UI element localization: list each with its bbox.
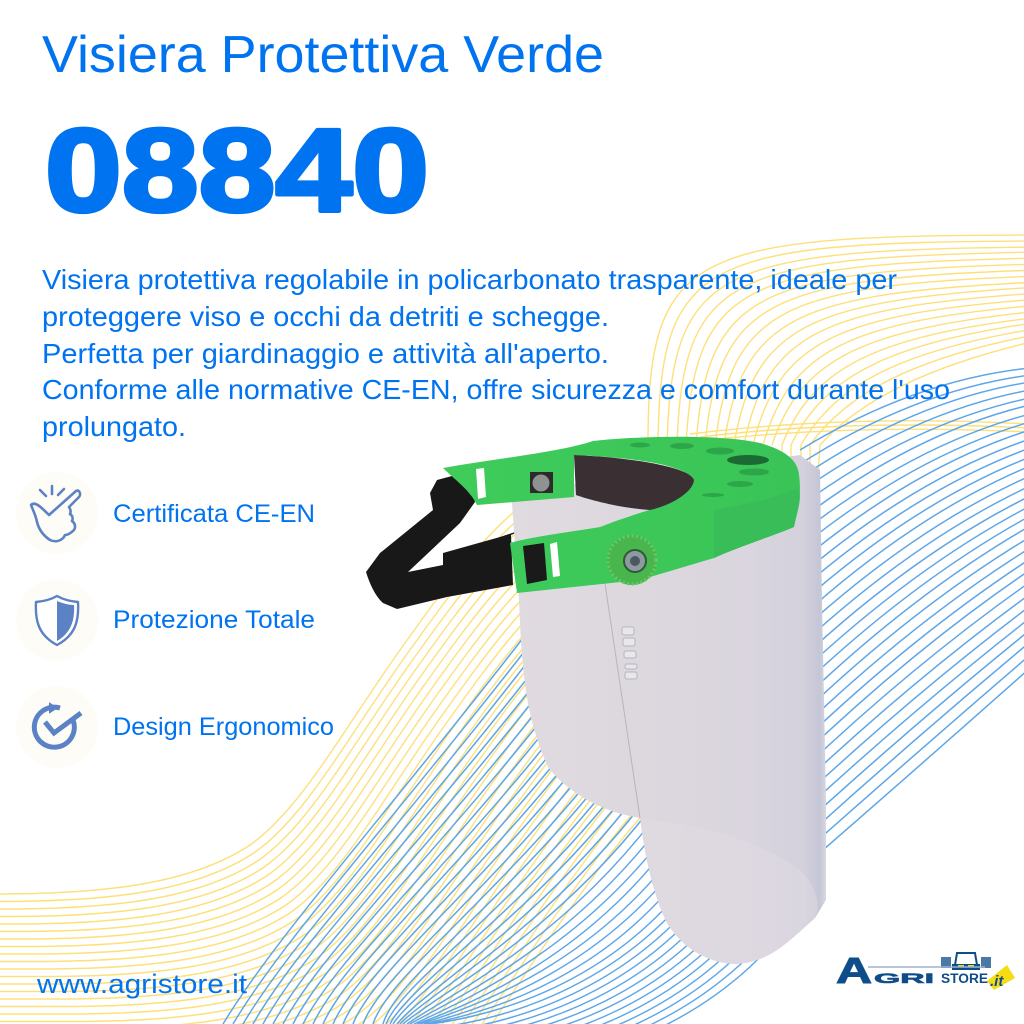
logo yellow tag: .it <box>990 973 1004 990</box>
feature: Design Ergonomico <box>16 686 334 768</box>
logo tractor <box>941 953 991 970</box>
icon: circular check <box>34 704 81 747</box>
description text: Conforme alle normative CE-EN, offre sicurezza e comfort durante l'uso <box>42 374 950 405</box>
feature: Protezione Totale: Protezione Totale <box>113 606 315 634</box>
description text: prolungato. <box>42 411 186 442</box>
description text <box>42 264 950 442</box>
feature: Certificata CE-EN <box>16 472 315 554</box>
arm slot and pin <box>476 468 486 499</box>
feature: Design Ergonomico: Design Ergonomico <box>113 713 334 741</box>
front slot with strap <box>523 543 547 584</box>
description text: Visiera protettiva regolabile in policarbonato trasparente, ideale per <box>42 264 897 295</box>
logo wordmark Agri: A <box>836 950 872 991</box>
website url: www.agristore.it <box>36 969 248 999</box>
description text: Perfetta per giardinaggio e attività all'aperto. <box>42 338 609 369</box>
feature: Protezione Totale <box>16 579 315 661</box>
green headband <box>443 437 800 593</box>
logo wordmark gri: GRI <box>874 970 934 986</box>
feature: Certificata CE-EN: Certificata CE-EN <box>113 500 315 528</box>
logo yellow tag <box>987 965 1015 990</box>
transparent visor pane <box>511 455 826 964</box>
engraved marking <box>622 627 637 679</box>
adjustment knob <box>607 535 657 585</box>
icon: pointing hand <box>31 486 80 541</box>
product photo: face shield <box>366 437 826 964</box>
foam padding <box>574 455 694 510</box>
logo: Agri Store <box>836 950 1015 991</box>
elastic strap <box>366 472 527 609</box>
logo wordmark store: STORE <box>941 971 988 986</box>
title: Visiera Protettiva Verde <box>42 26 604 84</box>
vent holes <box>630 442 769 497</box>
description text: proteggere viso e occhi da detriti e schegge. <box>42 301 609 332</box>
icon: shield <box>36 596 78 645</box>
product code: 08840 <box>45 105 429 237</box>
